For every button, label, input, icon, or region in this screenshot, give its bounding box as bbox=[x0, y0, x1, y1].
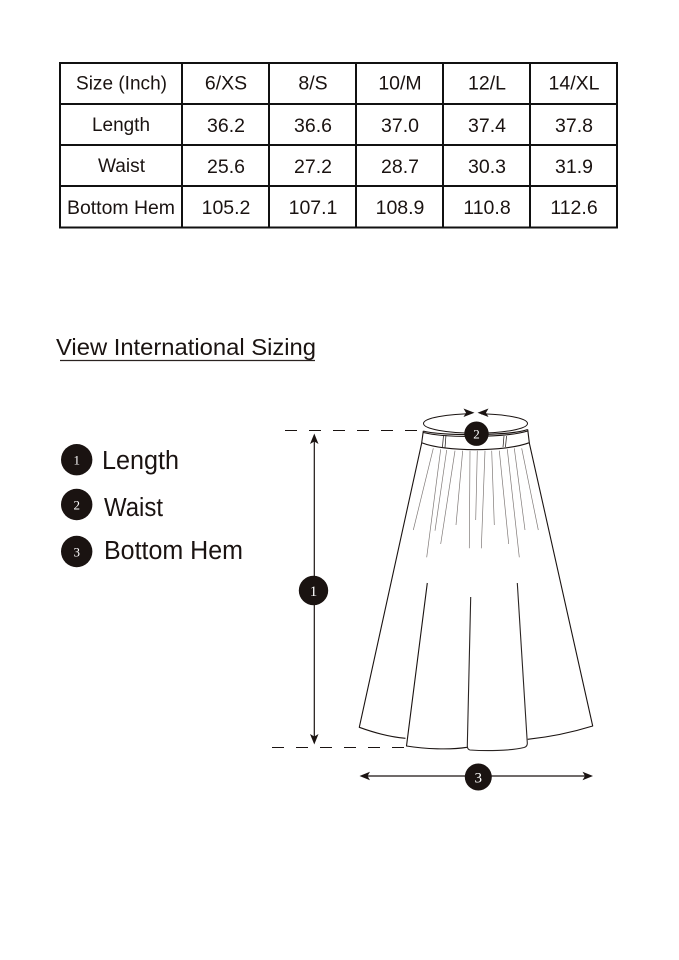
table row: bottom hem: 110.8 bbox=[463, 197, 511, 219]
table header row: Size (Inch) bbox=[76, 72, 167, 94]
legend item: bottom hem bbox=[61, 536, 243, 567]
table row: bottom hem: Bottom Hem bbox=[67, 198, 175, 219]
bottom hem arrow bbox=[360, 772, 593, 780]
legend item: waist: 2 bbox=[73, 497, 80, 512]
legend item: bottom hem: Bottom Hem bbox=[104, 537, 243, 565]
legend item: length: 1 bbox=[73, 452, 80, 468]
legend item: length: Length bbox=[102, 447, 179, 475]
table header row: 14/XL bbox=[549, 72, 600, 94]
table row: length: 37.8 bbox=[555, 115, 593, 137]
table header row: 6/XS bbox=[205, 72, 247, 94]
skirt diagram bbox=[272, 408, 593, 790]
table row: waist: 25.6 bbox=[207, 156, 245, 178]
table row: length: 37.0 bbox=[381, 115, 419, 137]
heading: view international sizing: View International Sizing bbox=[56, 334, 316, 360]
legend item: length bbox=[61, 444, 179, 475]
table row: length: 36.2 bbox=[207, 115, 245, 137]
table row: bottom hem: 112.6 bbox=[550, 197, 598, 219]
table row: bottom hem: 108.9 bbox=[376, 197, 424, 219]
table row: waist: 27.2 bbox=[294, 156, 332, 178]
legend item: bottom hem: 3 bbox=[73, 544, 80, 559]
table header row: 12/L bbox=[468, 72, 506, 94]
length arrow bbox=[310, 434, 318, 744]
legend item: waist: Waist bbox=[104, 494, 163, 522]
table row: length: 36.6 bbox=[294, 115, 332, 137]
table row: bottom hem bbox=[67, 197, 598, 219]
table header row: 8/S bbox=[298, 72, 328, 94]
table row: bottom hem: 107.1 bbox=[289, 197, 337, 219]
marker 3: bottom hem bbox=[465, 764, 492, 790]
legend bbox=[61, 444, 243, 567]
size table bbox=[60, 63, 617, 228]
waist ellipse with arrows bbox=[424, 408, 528, 433]
skirt pleats bbox=[413, 448, 538, 557]
table row: length: 37.4 bbox=[468, 115, 506, 137]
table row: length bbox=[92, 115, 593, 137]
table row: length: Length bbox=[92, 115, 150, 136]
marker 1: length: 1 bbox=[310, 584, 317, 600]
skirt outline bbox=[359, 430, 593, 751]
marker 1: length bbox=[299, 576, 328, 605]
table header row bbox=[76, 72, 600, 94]
marker 3: bottom hem: 3 bbox=[475, 770, 482, 786]
table row: waist: 30.3 bbox=[468, 156, 506, 178]
table row: waist: 28.7 bbox=[381, 156, 419, 178]
table row: waist: Waist bbox=[98, 156, 146, 177]
table row: waist: 31.9 bbox=[555, 156, 593, 178]
table row: bottom hem: 105.2 bbox=[202, 197, 250, 219]
length dimension lines bbox=[272, 430, 418, 748]
table row: waist bbox=[98, 156, 593, 178]
marker 2: waist bbox=[464, 422, 489, 446]
marker 2: waist: 2 bbox=[473, 426, 480, 442]
legend item: waist bbox=[61, 489, 163, 522]
table header row: 10/M bbox=[378, 72, 422, 94]
